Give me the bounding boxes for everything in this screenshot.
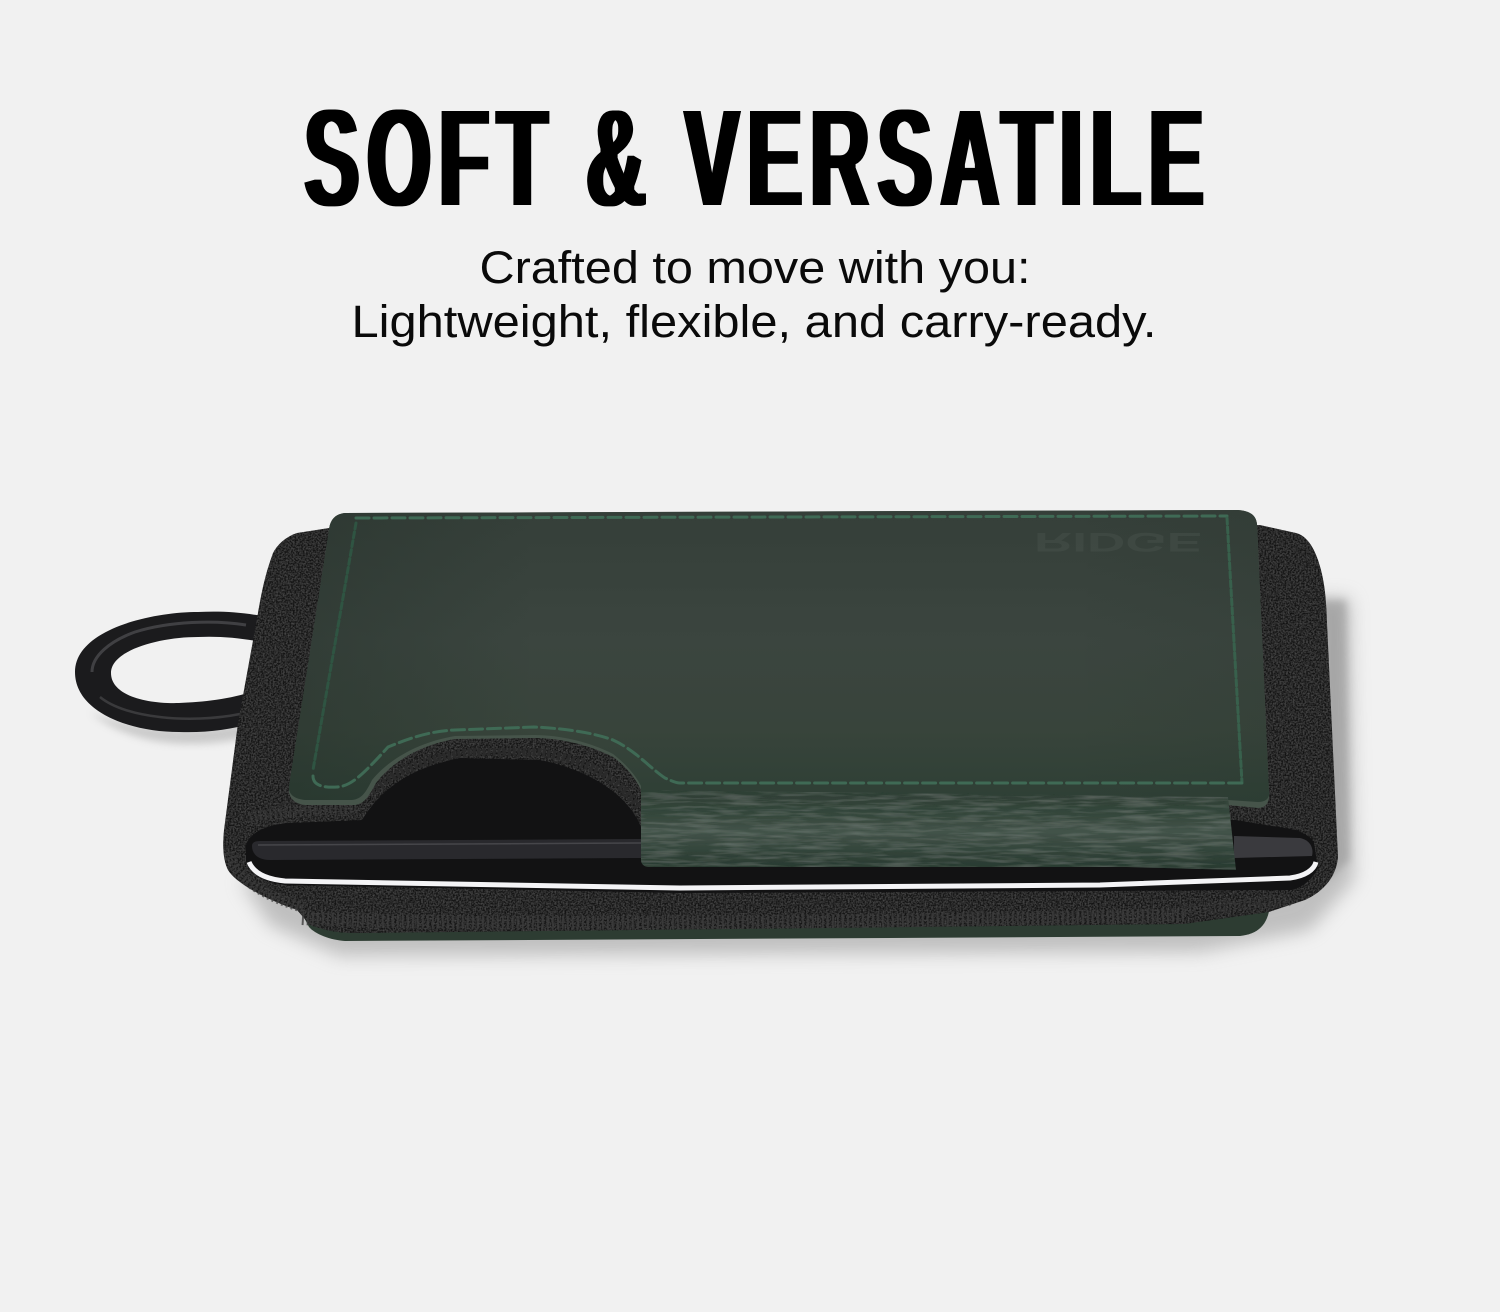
black card	[252, 836, 1312, 860]
card pocket interior	[246, 758, 1318, 893]
white card edge	[249, 862, 1316, 888]
lower leather panel	[298, 905, 1270, 941]
elastic band	[223, 525, 1338, 933]
wallet cast shadow	[90, 598, 1354, 956]
subtitle: Crafted to move with you:	[480, 242, 1030, 293]
elastic ribbing	[229, 808, 1290, 923]
icon: metal key ring	[75, 612, 262, 732]
stitching	[313, 516, 1242, 787]
notch elastic edge	[372, 752, 638, 808]
folded leather strap	[641, 790, 1236, 870]
embossed logo: RIDGE	[1034, 527, 1202, 557]
title: SOFT & VERSATILE	[305, 80, 1204, 237]
subtitle	[352, 242, 1156, 347]
front leather panel	[289, 510, 1269, 808]
subtitle: Lightweight, flexible, and carry-ready.	[352, 296, 1156, 347]
product: wallet	[75, 510, 1354, 956]
